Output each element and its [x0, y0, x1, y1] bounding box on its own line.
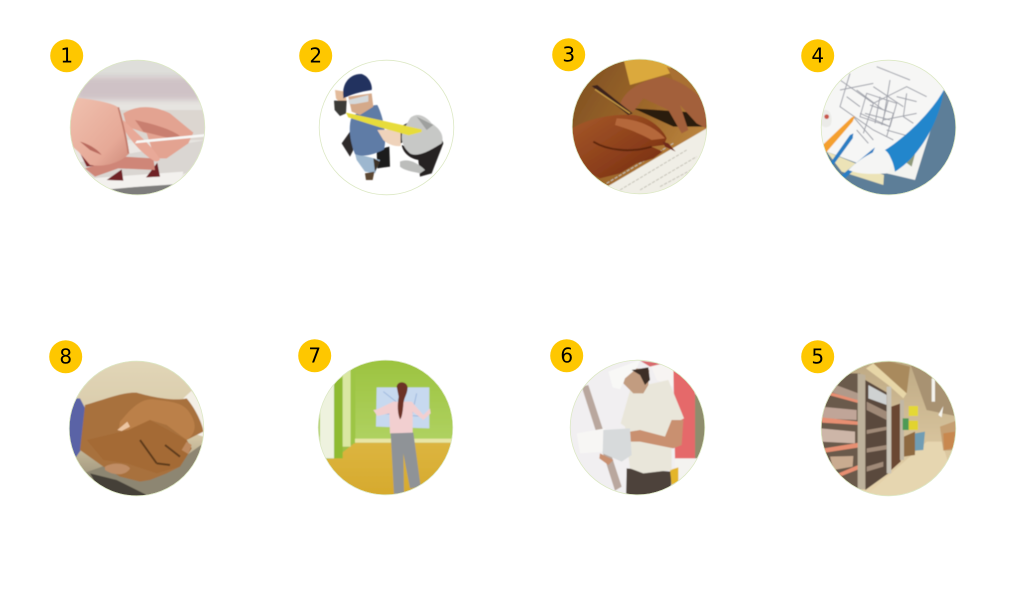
- number badge 5: 5: [811, 345, 824, 369]
- photo: hands on a tablet: [70, 60, 204, 194]
- step 4: [801, 39, 960, 197]
- number badge 5: [801, 340, 834, 373]
- step 5: [801, 340, 960, 498]
- process diagram of eight numbered photo steps: [49, 38, 956, 496]
- photo ring: [572, 59, 707, 194]
- photo ring: [821, 361, 956, 496]
- photo ring: [570, 360, 705, 495]
- number badge 2: 2: [309, 44, 322, 68]
- number badge 8: 8: [59, 345, 72, 369]
- number badge 1: [50, 39, 83, 72]
- photo: blueprints and pencils: [818, 58, 960, 197]
- photo: warehouse aisle: [818, 358, 960, 498]
- photo ring: [318, 360, 453, 495]
- number badge 7: 7: [308, 344, 321, 368]
- photo ring: [821, 60, 956, 195]
- photo ring: [319, 60, 454, 195]
- photo: hand signing a contract: [570, 57, 710, 197]
- number badge 8: [49, 340, 82, 373]
- photo: woman holding a plan in a green room: [317, 358, 457, 498]
- step 2: [299, 39, 457, 197]
- number badge 4: [801, 39, 834, 72]
- number badge 7: [298, 339, 331, 372]
- photo: handshake: [67, 358, 207, 498]
- photo ring: [70, 60, 205, 195]
- step 8: [49, 340, 207, 498]
- photo: worker measuring with a tape: [333, 73, 444, 181]
- photo ring: [69, 361, 204, 496]
- photo: builder reading a document: [570, 360, 704, 494]
- step 7: [298, 339, 457, 498]
- number badge 3: [552, 38, 585, 71]
- number badge 4: 4: [811, 44, 824, 68]
- step 6: [550, 339, 710, 500]
- step 1: [50, 39, 210, 200]
- step 3: [552, 38, 710, 197]
- number badge 6: [550, 339, 583, 372]
- number badge 1: 1: [60, 44, 73, 68]
- number badge 2: [299, 39, 332, 72]
- number badge 3: 3: [562, 43, 575, 67]
- number badge 6: 6: [560, 344, 573, 368]
